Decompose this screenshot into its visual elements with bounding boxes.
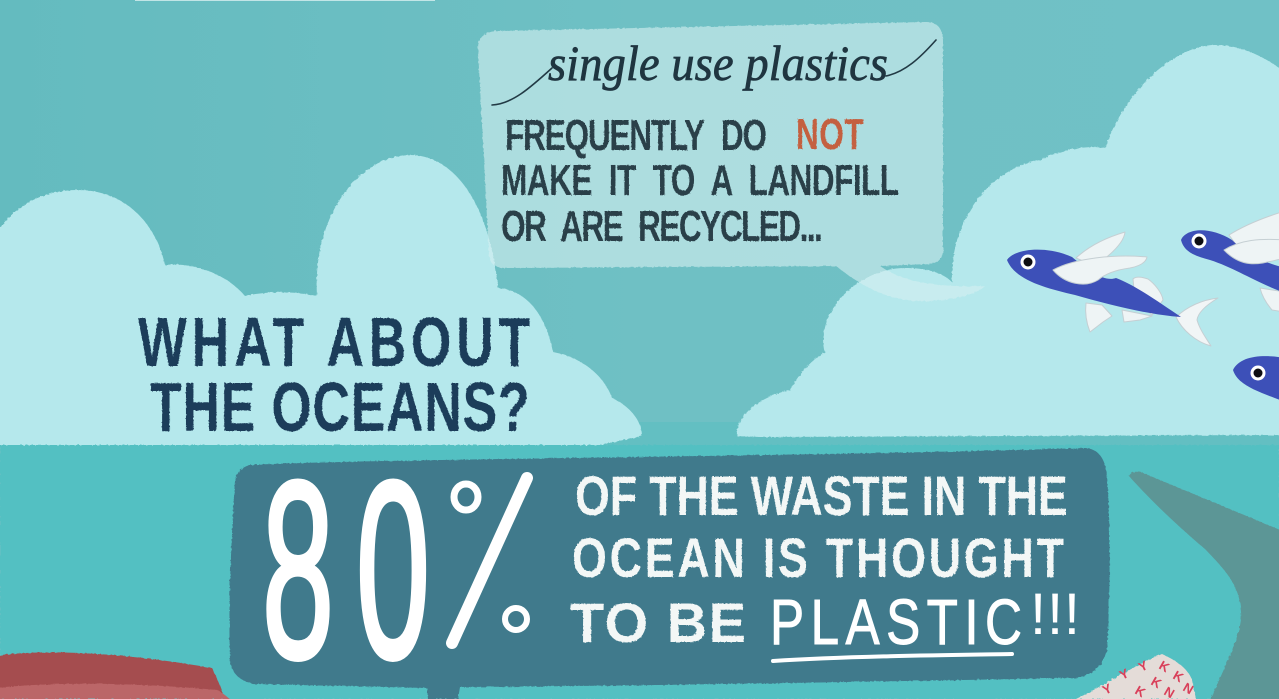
exclamation marks: !!! (1030, 582, 1080, 647)
patterned plastic scrap: K (1156, 658, 1173, 676)
sky background (0, 0, 1279, 445)
stat emphasis PLASTIC: PLASTIC (770, 588, 1022, 658)
patterned plastic scrap: K (1170, 668, 1187, 686)
patterned plastic scrap (1076, 654, 1196, 699)
heading: what about the oceans: THE OCEANS? (150, 368, 530, 447)
script heading: single use plastics (548, 35, 888, 91)
patterned plastic scrap: N (1180, 680, 1196, 697)
fish 1 (1007, 232, 1218, 346)
patterned plastic scrap: K (1148, 674, 1165, 692)
bubble emphasis NOT: NOT (796, 110, 864, 159)
bubble line 2: MAKE IT TO A LANDFILL (501, 156, 899, 205)
top white edge (135, 0, 435, 1)
bubble line 1: FREQUENTLY DO (505, 111, 767, 160)
fish 3 (1233, 356, 1279, 402)
heading: what about the oceans (138, 303, 530, 447)
stat line 2: OCEAN IS THOUGHT (572, 526, 1064, 589)
stat panel: 80 percent (229, 430, 1110, 699)
right cloud (737, 45, 1279, 437)
horizon band (0, 422, 1279, 446)
patterned plastic scrap: Y (1100, 680, 1114, 698)
heading: what about the oceans: WHAT ABOUT (138, 303, 530, 382)
sea (0, 445, 1279, 699)
percent sign (452, 478, 527, 643)
underline (773, 654, 1012, 661)
patterned plastic scrap: Y (1117, 665, 1131, 683)
red object bottom left (0, 652, 230, 699)
bubble line 3: OR ARE RECYCLED... (501, 202, 823, 251)
stat line 1: OF THE WASTE IN THE (575, 464, 1068, 527)
left cloud (0, 155, 642, 445)
script heading swash (492, 40, 936, 105)
speech bubble: single use plastics (478, 22, 985, 301)
fish 2 (1181, 211, 1279, 312)
patterned plastic scrap: Y (1136, 657, 1150, 675)
stat line 3: TO BE (570, 591, 746, 654)
shark fin (1129, 472, 1279, 699)
